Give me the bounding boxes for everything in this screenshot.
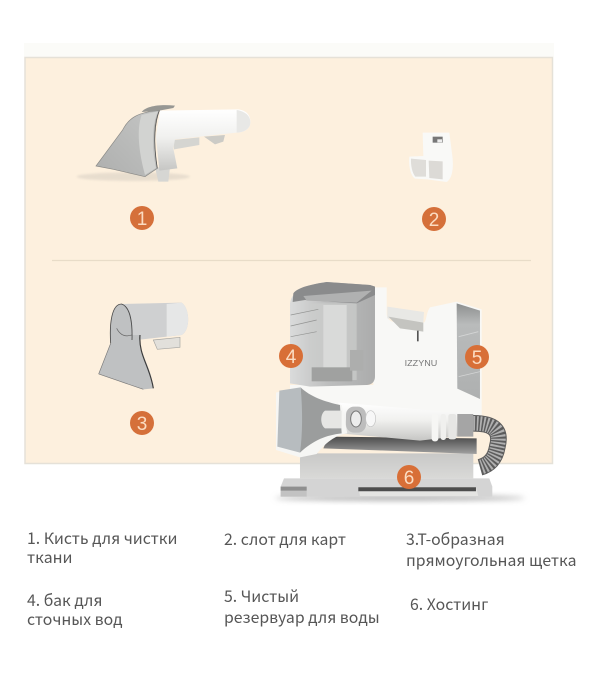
white silhouette [409, 133, 453, 182]
brand label: IZZYNU [405, 359, 438, 368]
tank 5: clean water [457, 303, 480, 399]
base plate [281, 478, 492, 497]
shadow slit under handle [323, 437, 477, 454]
part 2 number badge: 2 [429, 210, 439, 231]
part 2: card slot [409, 133, 453, 182]
caption 3: прямоугольная щетка [406, 548, 577, 571]
machine: main unit [276, 282, 498, 497]
badge 4 [279, 344, 303, 368]
caption 5: резервуар для воды [224, 605, 380, 628]
body white shell [290, 287, 482, 415]
part 2 number badge [422, 207, 446, 231]
right pocket [429, 161, 443, 179]
handle tube [338, 403, 460, 441]
part 1 number badge: 1 [137, 209, 147, 230]
panel divider [52, 260, 531, 262]
part 1 number badge [130, 206, 154, 230]
nozzle [96, 111, 159, 177]
part 3: T-shaped rectangular brush [99, 303, 188, 389]
handle button [346, 407, 366, 433]
caption 6: 6. Хостинг [410, 592, 488, 615]
badge 6: 6 [404, 468, 414, 489]
badge 6 [397, 465, 421, 489]
caption 2: 2. слот для карт [224, 527, 346, 550]
part 3 number badge: 3 [137, 414, 147, 435]
trigger [204, 135, 225, 144]
transparent head [99, 304, 153, 389]
hose [460, 423, 498, 467]
caption 4: сточных вод [27, 607, 123, 630]
tank 4: waste water [290, 282, 375, 387]
pedestal [300, 453, 473, 478]
caption 1: ткани [27, 545, 73, 568]
tube [120, 303, 188, 340]
grip underside [173, 137, 199, 149]
body slot mark [417, 331, 419, 341]
panel: beige background [25, 58, 552, 464]
caption 1: 1. Кисть для чистки [27, 526, 178, 549]
caption 4: 4. бак для [27, 588, 102, 611]
caption 3: 3.Т-образная [406, 527, 505, 550]
top rim [142, 105, 175, 112]
badge 4: 4 [286, 347, 297, 368]
floor shadow under machine [275, 496, 525, 500]
part 3 number badge [130, 411, 154, 435]
slot window [433, 137, 443, 143]
caption 5: 5. Чистый [224, 584, 299, 607]
part 1: fabric cleaning brush [77, 105, 250, 182]
tube body [156, 109, 250, 171]
top faint band [24, 43, 554, 57]
badge 5 [465, 345, 489, 369]
cleaning head [276, 387, 347, 457]
badge 5: 5 [472, 348, 482, 369]
left pocket [411, 159, 426, 177]
brush bristles [155, 167, 170, 182]
body carry handle [387, 307, 424, 323]
clip [153, 337, 180, 349]
